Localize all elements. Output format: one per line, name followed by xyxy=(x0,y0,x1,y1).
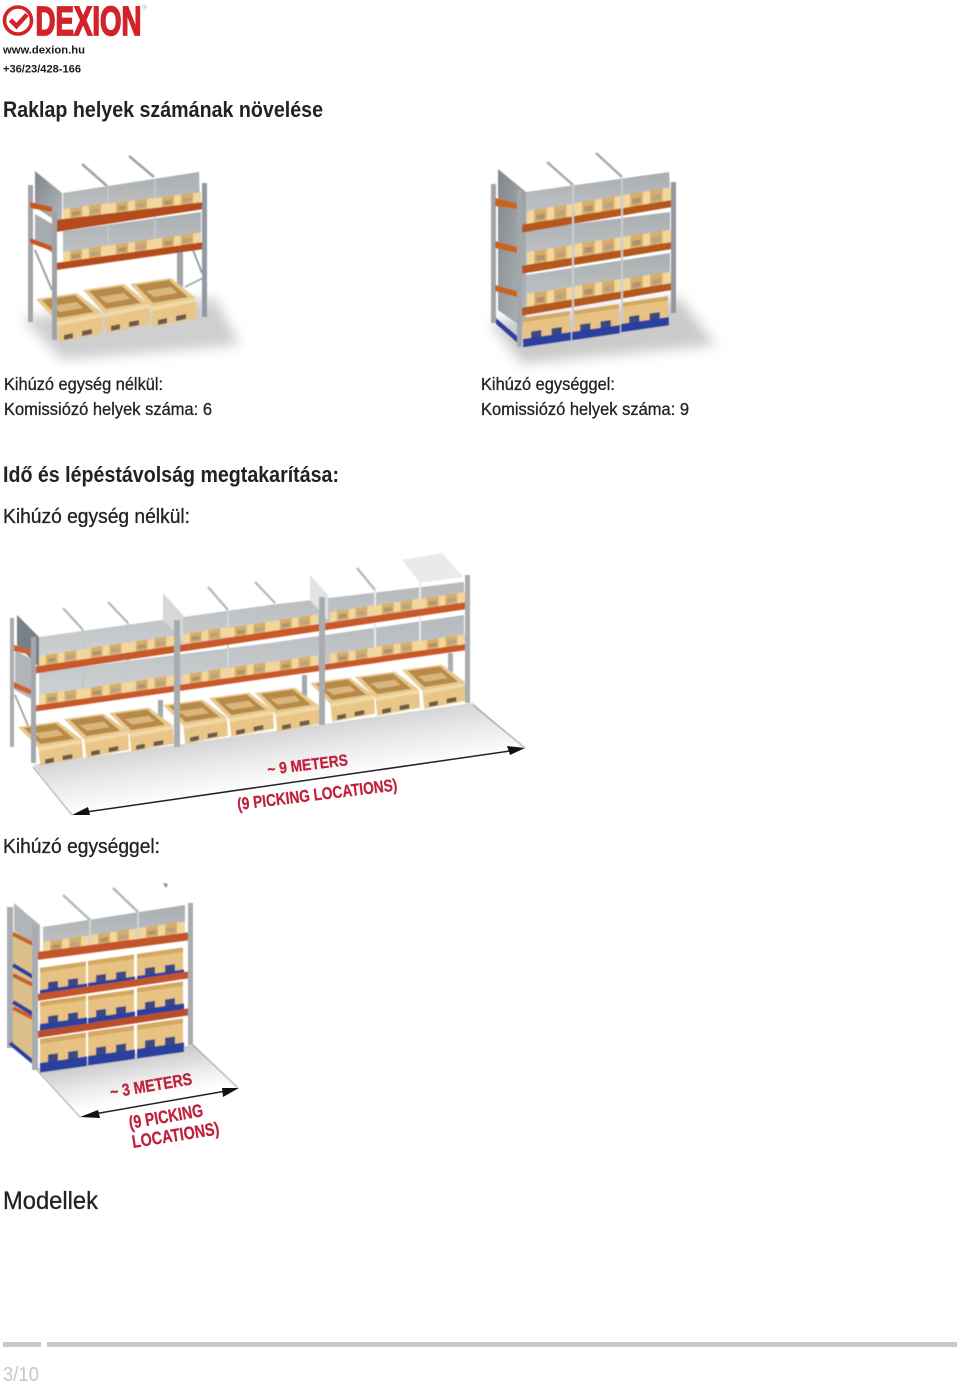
icon: red check circle xyxy=(4,7,32,34)
dimension label: 9 picking locations: LOCATIONS) xyxy=(130,1118,221,1152)
dimension arrow: 9 meters xyxy=(72,746,525,815)
caption: without unit: Kihúzó egység nélkül: xyxy=(4,374,163,394)
dimension arrow: 3 meters xyxy=(80,1088,239,1118)
subheading: with pull-out unit: Kihúzó egységgel: xyxy=(3,836,160,858)
logo: Dexion xyxy=(4,0,148,44)
illustration: rack without pull-out unit, 6 places xyxy=(22,156,240,360)
footer progress bar xyxy=(3,1342,957,1347)
dimension label: 9 picking locations: (9 PICKING xyxy=(127,1100,205,1133)
shelf panels xyxy=(39,582,464,670)
caption: with unit: Komissiózó helyek száma: 9 xyxy=(481,399,689,419)
heading: pallet places: Raklap helyek számának növelése xyxy=(3,97,323,122)
illustration: long rack, 9 meters xyxy=(10,553,525,815)
lower row pallets xyxy=(39,634,465,705)
beams xyxy=(32,602,467,674)
heading: time and walking distance savings: Idő és lépéstávolság megtakarítása: xyxy=(3,462,339,487)
floor area xyxy=(37,1045,238,1117)
illustration: rack with pull-out unit, 9 places xyxy=(490,153,716,364)
registered mark: ® xyxy=(142,4,148,12)
dimension label: 9 picking locations xyxy=(127,1100,221,1152)
illustration: compact rack, 3 meters xyxy=(7,883,238,1117)
floor area xyxy=(33,703,525,815)
heading: models: Modellek xyxy=(3,1187,98,1215)
upper row pallets xyxy=(39,592,465,666)
dimension label: 3 meters: ~ 3 METERS xyxy=(109,1070,194,1102)
dimension label: 9 meters: ~ 9 METERS xyxy=(266,752,349,779)
cap box xyxy=(402,553,463,583)
website: www.dexion.hu xyxy=(2,44,85,56)
phone number: +36/23/428-166 xyxy=(3,64,81,76)
caption: without unit: Komissiózó helyek száma: 6 xyxy=(4,399,212,419)
subheading: without pull-out unit: Kihúzó egység nélkül: xyxy=(3,506,190,528)
caption: without unit xyxy=(4,374,212,419)
floor crates xyxy=(18,665,467,766)
uprights and divider panels xyxy=(163,593,183,640)
caption: with unit: Kihúzó egységgel: xyxy=(481,374,615,394)
caption: with unit xyxy=(481,374,689,419)
dimension label: 9 picking locations: (9 PICKING LOCATIONS) xyxy=(236,775,398,814)
